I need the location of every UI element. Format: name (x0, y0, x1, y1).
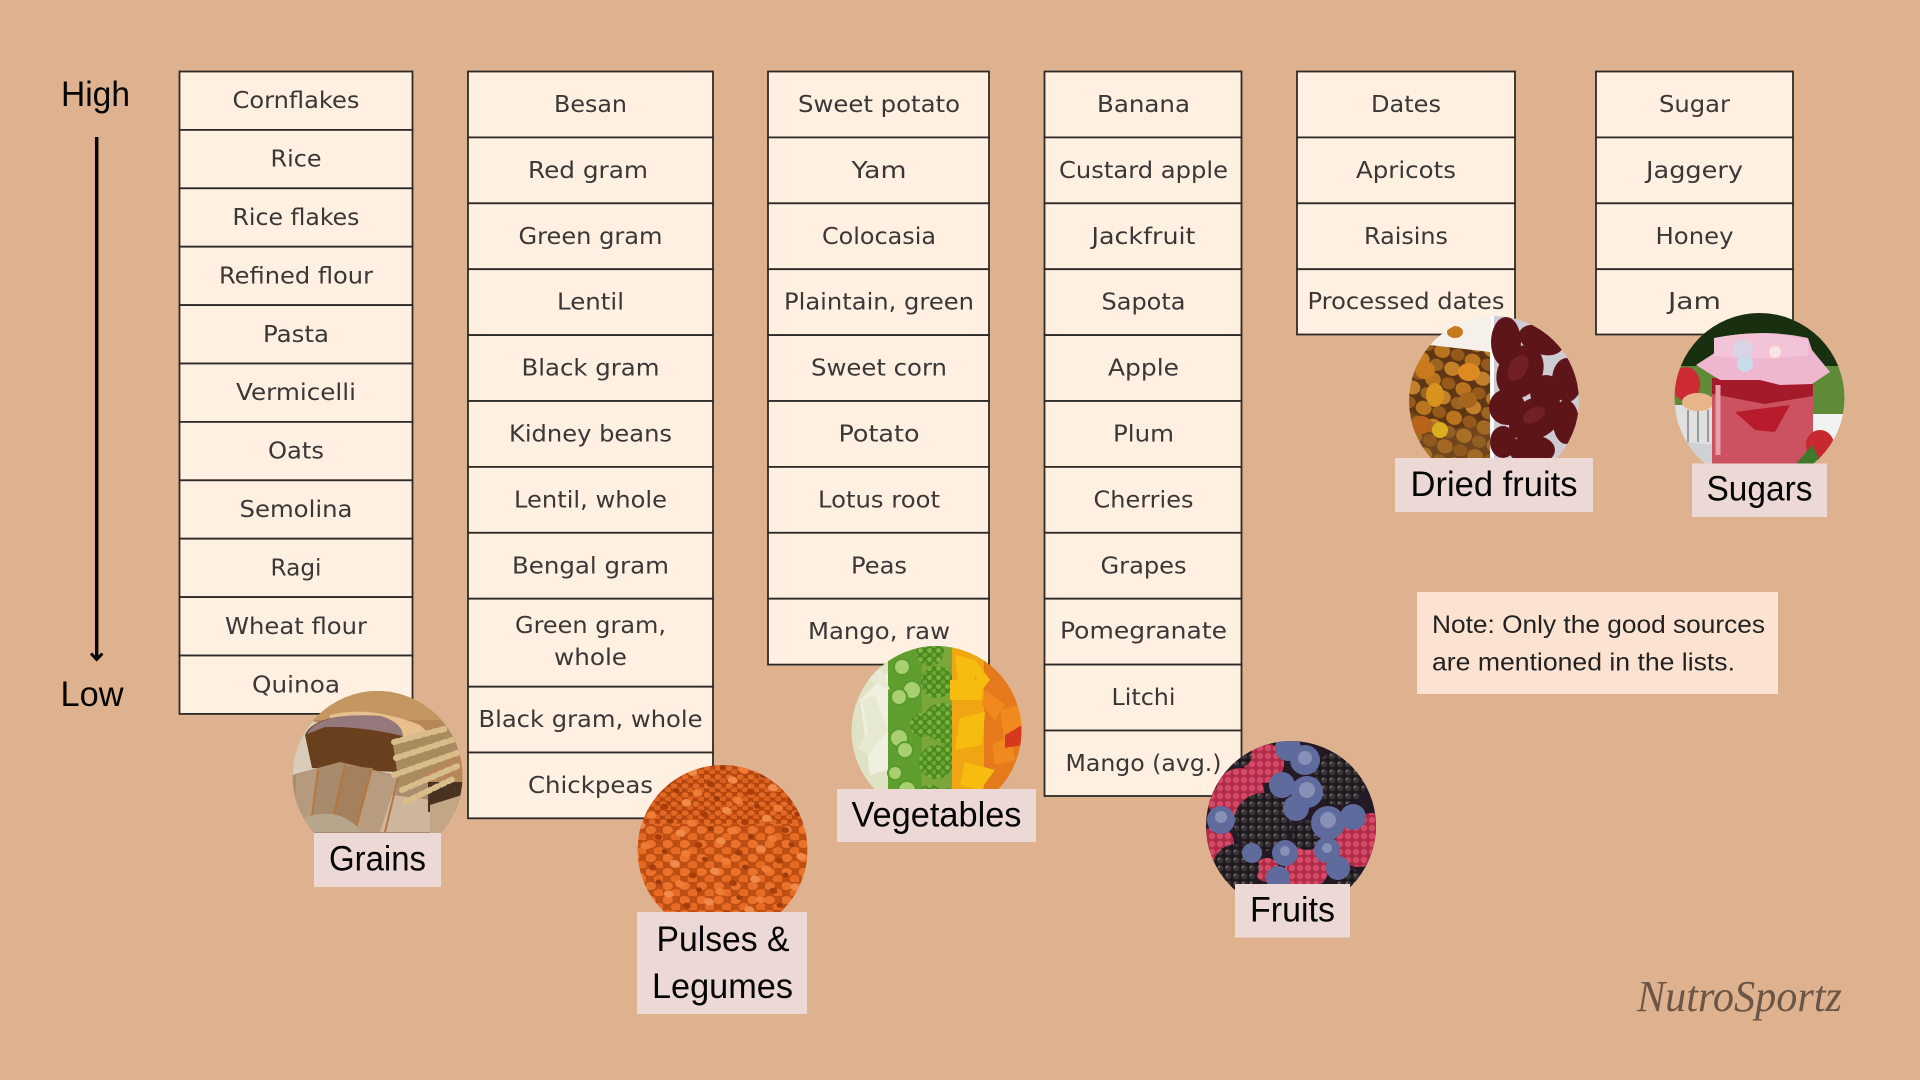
row: Green gram, whole (468, 599, 713, 687)
row: Green gram (468, 203, 713, 269)
row: Ragi (180, 539, 412, 597)
row: Chickpeas (468, 752, 713, 818)
row: Mango (avg.): Mango (avg.) (1066, 751, 1222, 777)
label: Fruits (1235, 884, 1350, 938)
panel: fruits list (1044, 72, 1242, 796)
row: Banana (1044, 72, 1242, 137)
row: Potato (768, 401, 989, 467)
row: Lotus root (768, 467, 989, 533)
row: Ragi: Ragi (270, 555, 322, 581)
label: Grains (314, 833, 441, 887)
row: Semolina (180, 480, 412, 539)
row: Semolina: Semolina (240, 497, 352, 523)
arrow: high to low (91, 137, 102, 660)
row: Jam: Jam (1666, 289, 1721, 315)
row: Rice flakes: Rice flakes (232, 205, 360, 231)
row: Dates: Dates (1371, 92, 1441, 118)
label: Sugars: Sugars (1706, 470, 1812, 508)
label: Fruits: Fruits (1250, 891, 1335, 930)
row: Wheat flour (180, 597, 412, 656)
label: Pulses and Legumes: Legumes (652, 967, 793, 1006)
label: Pulses and Legumes: Pulses & (656, 920, 790, 959)
row: Kidney beans: Kidney beans (509, 422, 672, 448)
row: Sweet potato (768, 72, 989, 137)
label: Sugars (1692, 464, 1827, 517)
row: Besan: Besan (554, 92, 627, 118)
row: Chickpeas: Chickpeas (528, 773, 653, 799)
row: Custard apple: Custard apple (1059, 158, 1228, 184)
row: Apple: Apple (1108, 356, 1179, 382)
panel: sugars list (1596, 72, 1793, 334)
row: Cornflakes: Cornflakes (232, 88, 360, 114)
row: Banana: Banana (1097, 92, 1190, 118)
row: Processed dates (1297, 269, 1515, 334)
row: Black gram (468, 335, 713, 401)
row: Quinoa (180, 656, 412, 714)
row: Apple (1044, 335, 1242, 401)
row: Grapes (1044, 533, 1242, 599)
row: Green gram: Green gram (518, 224, 662, 250)
row: Sugar: Sugar (1659, 92, 1731, 118)
row: Mango (avg.) (1044, 730, 1242, 796)
icon: raisins and dates (1409, 316, 1579, 458)
row: Pasta: Pasta (263, 322, 329, 348)
row: Jackfruit: Jackfruit (1089, 224, 1196, 250)
callout: note (1417, 592, 1778, 694)
icon: chopped vegetables (852, 646, 1022, 789)
row: Pomegranate: Pomegranate (1060, 618, 1227, 644)
row: Processed dates: Processed dates (1308, 289, 1504, 315)
row: Colocasia: Colocasia (822, 224, 936, 250)
panel: dried fruits list (1297, 72, 1515, 334)
row: Cherries (1044, 467, 1242, 533)
row: Refined flour: Refined flour (219, 263, 374, 289)
row: Refined flour (180, 247, 412, 305)
axis label: High: High (61, 75, 130, 114)
row: Potato: Potato (838, 422, 920, 448)
row: Quinoa: Quinoa (252, 673, 340, 699)
callout: note: Note: Only the good sources (1432, 611, 1765, 639)
row: Lentil, whole (468, 467, 713, 533)
row: Jaggery: Jaggery (1644, 158, 1743, 184)
label: Vegetables: Vegetables (852, 796, 1022, 835)
row: Custard apple (1044, 137, 1242, 203)
label: Vegetables (837, 789, 1036, 842)
panel: pulses and legumes list (468, 72, 713, 818)
row: Green gram, whole: whole (554, 645, 627, 671)
label: Pulses and Legumes (637, 912, 807, 1014)
row: Pasta (180, 305, 412, 364)
row: Sugar (1596, 72, 1793, 137)
row: Sweet corn: Sweet corn (811, 356, 947, 382)
row: Black gram, whole: Black gram, whole (478, 707, 702, 733)
row: Apricots (1297, 137, 1515, 203)
row: Honey: Honey (1656, 224, 1734, 250)
row: Oats: Oats (268, 439, 324, 465)
row: Sapota (1044, 269, 1242, 335)
row: Vermicelli (180, 364, 412, 422)
row: Apricots: Apricots (1356, 158, 1456, 184)
row: Black gram, whole (468, 687, 713, 752)
row: Lotus root: Lotus root (818, 487, 940, 513)
row: Honey (1596, 203, 1793, 269)
row: Grapes: Grapes (1100, 553, 1186, 579)
row: Plaintain, green (768, 269, 989, 335)
row: Oats (180, 422, 412, 480)
row: Vermicelli: Vermicelli (236, 380, 356, 406)
row: Peas: Peas (851, 553, 907, 579)
row: Peas (768, 533, 989, 599)
icon: bread and wheat (290, 688, 465, 840)
row: Yam (768, 137, 989, 203)
panel: vegetables list (768, 72, 989, 665)
row: Dates (1297, 72, 1515, 137)
row: Lentil, whole: Lentil, whole (514, 487, 667, 513)
row: Colocasia (768, 203, 989, 269)
row: Mango, raw: Mango, raw (808, 619, 950, 645)
panel: grains list (180, 72, 412, 714)
row: Cornflakes (180, 72, 412, 130)
row: Sapota: Sapota (1102, 290, 1186, 316)
row: Lentil: Lentil (557, 290, 624, 316)
icon: red lentils (636, 764, 809, 916)
axis label: Low: Low (60, 675, 124, 714)
row: Sweet corn (768, 335, 989, 401)
row: Raisins: Raisins (1364, 224, 1448, 250)
row: Pomegranate (1044, 599, 1242, 665)
row: Red gram (468, 137, 713, 203)
icon: jar of jam (1674, 313, 1844, 464)
label: Dried fruits: Dried fruits (1410, 465, 1578, 504)
label: Grains: Grains (329, 840, 426, 879)
row: Kidney beans (468, 401, 713, 467)
row: Lentil (468, 269, 713, 335)
row: Raisins (1297, 203, 1515, 269)
row: Green gram, whole: Green gram, (515, 613, 666, 639)
row: Plaintain, green: Plaintain, green (784, 290, 974, 316)
row: Bengal gram (468, 533, 713, 599)
row: Rice flakes (180, 188, 412, 247)
row: Rice (180, 130, 412, 188)
callout: note: are mentioned in the lists. (1432, 649, 1735, 677)
row: Bengal gram: Bengal gram (512, 553, 669, 579)
icon: mixed berries (1206, 741, 1376, 890)
row: Cherries: Cherries (1094, 487, 1194, 513)
row: Litchi: Litchi (1112, 685, 1176, 711)
row: Rice: Rice (270, 147, 322, 173)
row: Besan (468, 72, 713, 137)
row: Red gram: Red gram (528, 158, 648, 184)
row: Litchi (1044, 665, 1242, 730)
row: Plum (1044, 401, 1242, 467)
row: Jaggery (1596, 137, 1793, 203)
row: Wheat flour: Wheat flour (225, 614, 368, 640)
row: Black gram: Black gram (522, 356, 660, 382)
row: Jackfruit (1044, 203, 1242, 269)
row: Yam: Yam (850, 158, 906, 184)
row: Plum: Plum (1113, 422, 1174, 448)
row: Sweet potato: Sweet potato (798, 92, 960, 118)
row: Jam (1596, 269, 1793, 334)
label: Dried fruits (1395, 458, 1593, 512)
row: Mango, raw (768, 599, 989, 665)
watermark: NutroSportz: NutroSportz (1636, 972, 1842, 1021)
